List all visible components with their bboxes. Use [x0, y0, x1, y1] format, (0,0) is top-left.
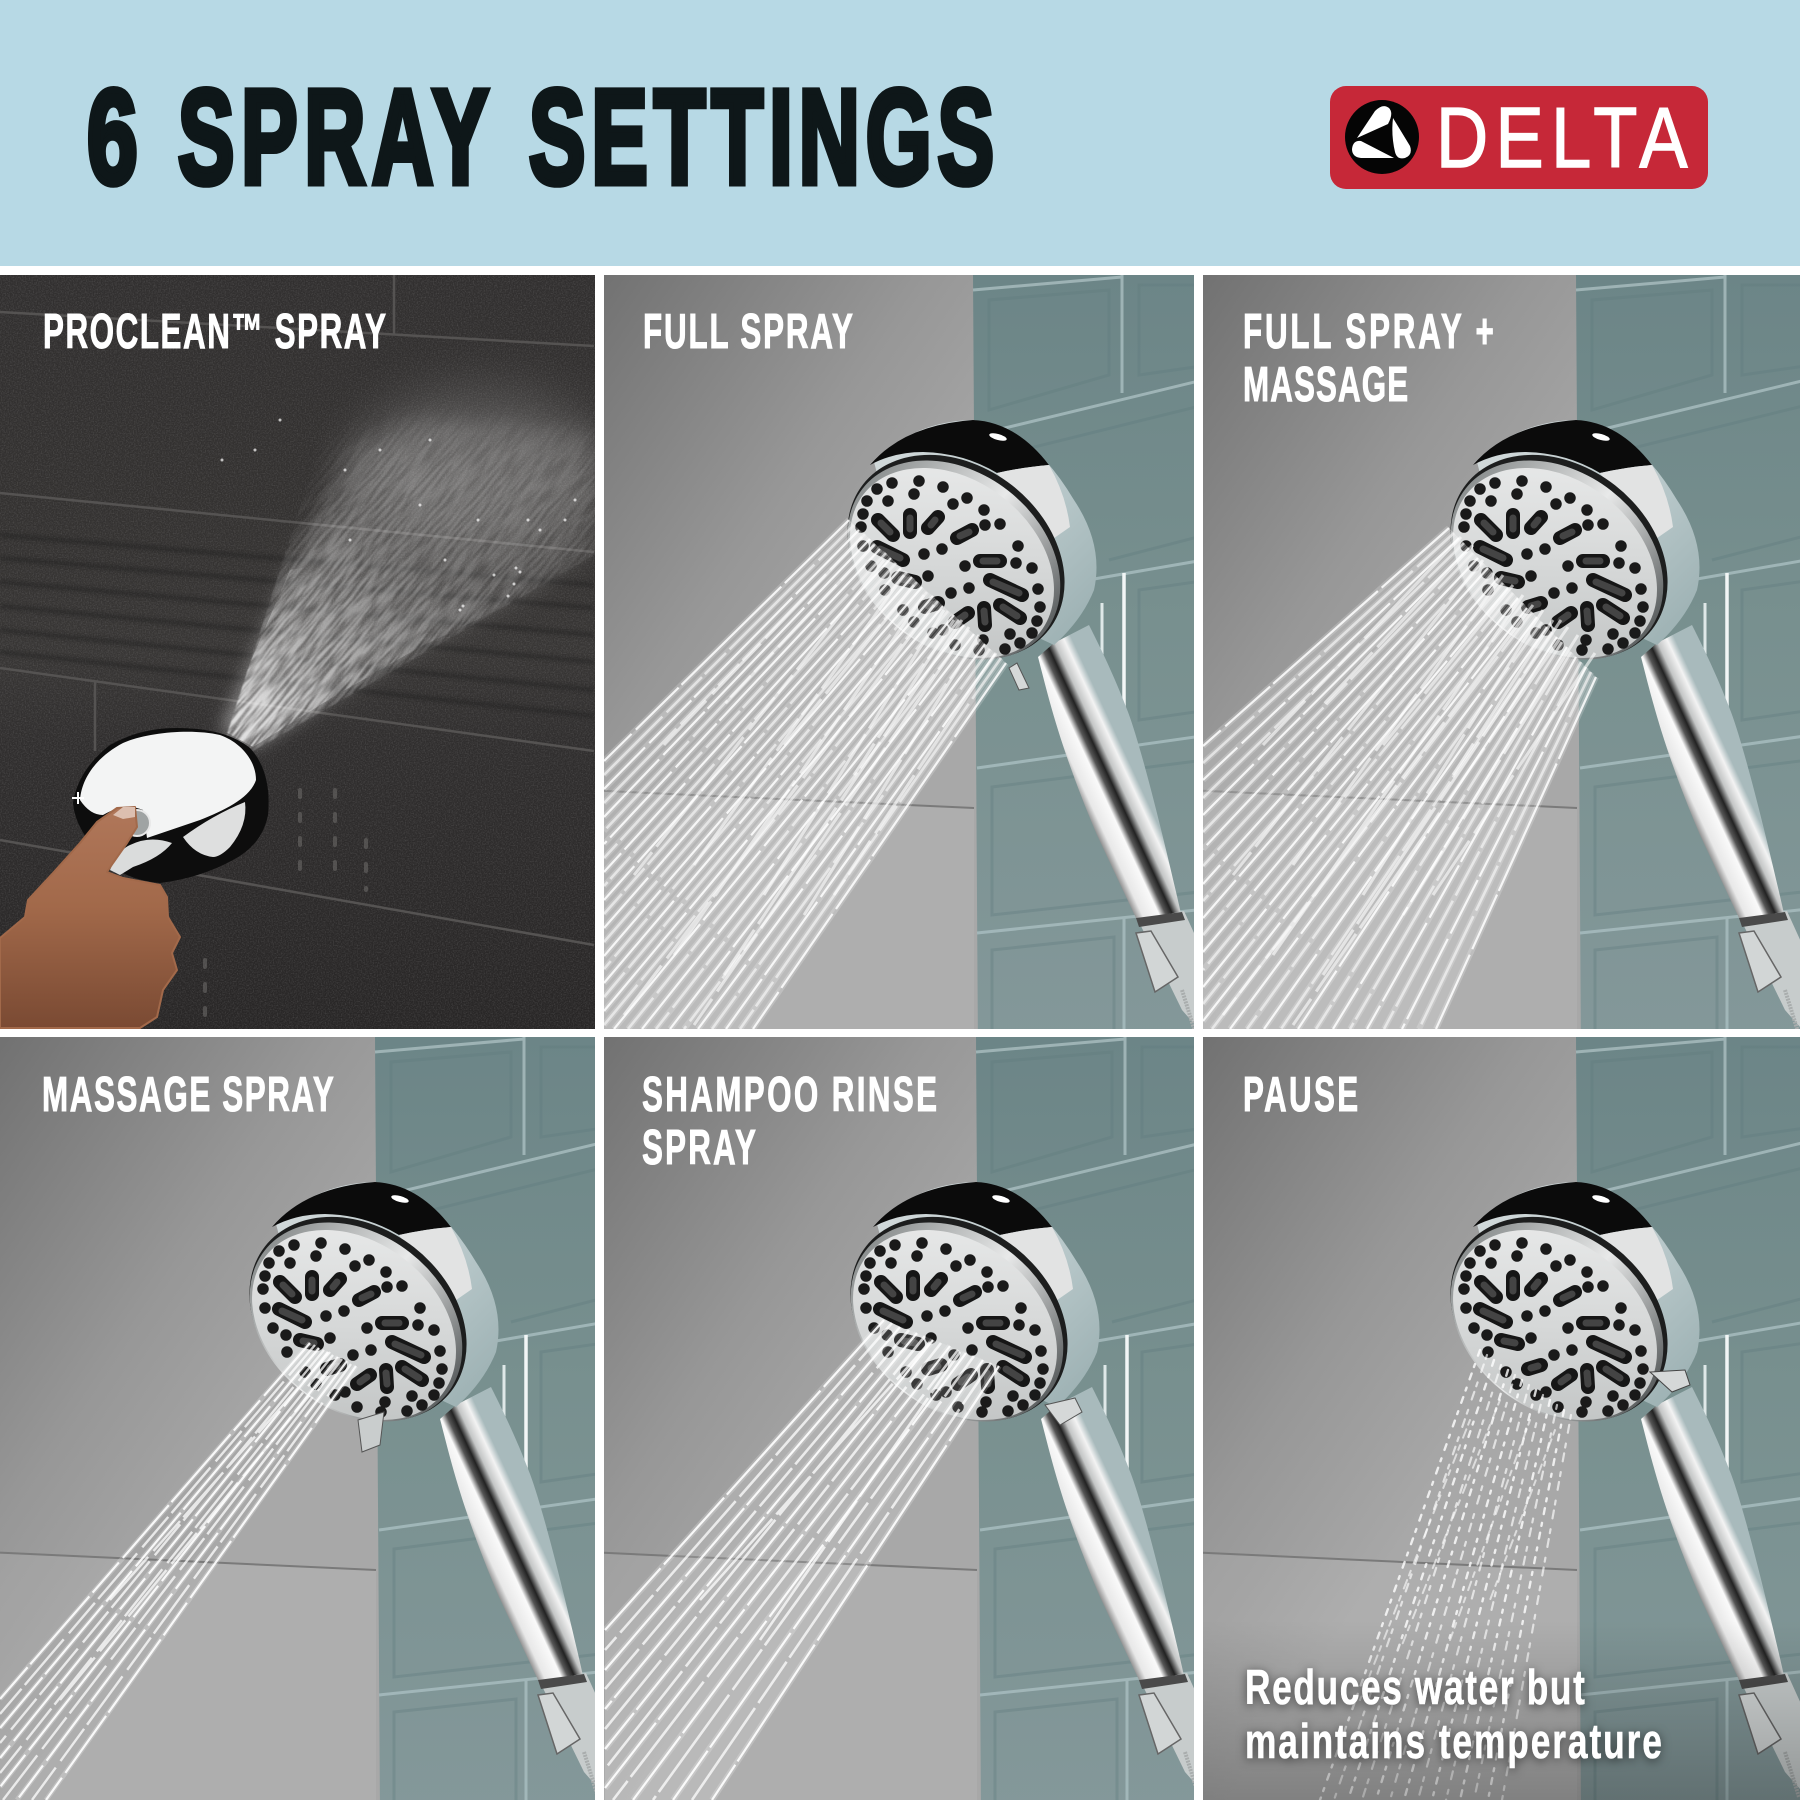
- label: full spray + massage: [1243, 304, 1494, 412]
- water: full spray and massage: [1203, 528, 1596, 1029]
- label: full spray: FULL SPRAY: [643, 304, 853, 359]
- bottom shade behind caption: [1203, 1620, 1800, 1800]
- label: pause: PAUSE: [1243, 1067, 1358, 1122]
- panel: pause: [1187, 1037, 1800, 1800]
- hand: [0, 807, 180, 1028]
- water: massage jet: [0, 1343, 356, 1800]
- caption: pause description: maintains temperature: [1245, 1714, 1662, 1769]
- spray base glow: [222, 420, 595, 747]
- panel: full spray + massage: [1187, 275, 1800, 1055]
- shower head back view: [72, 728, 269, 883]
- water: pause droplets: [1320, 1350, 1571, 1800]
- title: [87, 62, 994, 212]
- switch lever: [1009, 663, 1029, 690]
- label: full spray + massage: FULL SPRAY +: [1243, 304, 1494, 359]
- header band: [0, 0, 1800, 266]
- title: SPRAY: [178, 62, 489, 212]
- label: full spray + massage: MASSAGE: [1243, 357, 1408, 412]
- caption: pause description: Reduces water but: [1245, 1660, 1585, 1715]
- panel: shampoo rinse spray: [587, 1037, 1247, 1800]
- caption: pause description: [1245, 1660, 1662, 1769]
- panel: full spray: [604, 275, 1194, 1029]
- label: shampoo rinse spray: SHAMPOO RINSE: [642, 1067, 937, 1122]
- logo: Delta: DELTA: [1436, 90, 1688, 185]
- water: shampoo rinse: [605, 1320, 999, 1800]
- title: 6: [87, 63, 138, 212]
- label: shampoo rinse spray: [642, 1067, 937, 1175]
- spray fan: [226, 424, 595, 751]
- mist cloud: [355, 390, 605, 540]
- label: massage spray: MASSAGE SPRAY: [42, 1067, 334, 1122]
- spray droplets: [222, 420, 575, 610]
- label: shampoo rinse spray: SPRAY: [642, 1120, 756, 1175]
- water: full spray: [604, 520, 1006, 1029]
- panel: massage spray: [0, 1037, 646, 1800]
- switch lever: [1650, 1370, 1690, 1392]
- title: SETTINGS: [529, 62, 994, 212]
- switch lever: [1045, 1398, 1082, 1425]
- logo: Delta: [1330, 86, 1708, 189]
- switch lever: [358, 1412, 384, 1452]
- label: PROCLEAN spray: PROCLEAN™ SPRAY: [43, 304, 386, 359]
- panel: proclean spray: [0, 275, 595, 1029]
